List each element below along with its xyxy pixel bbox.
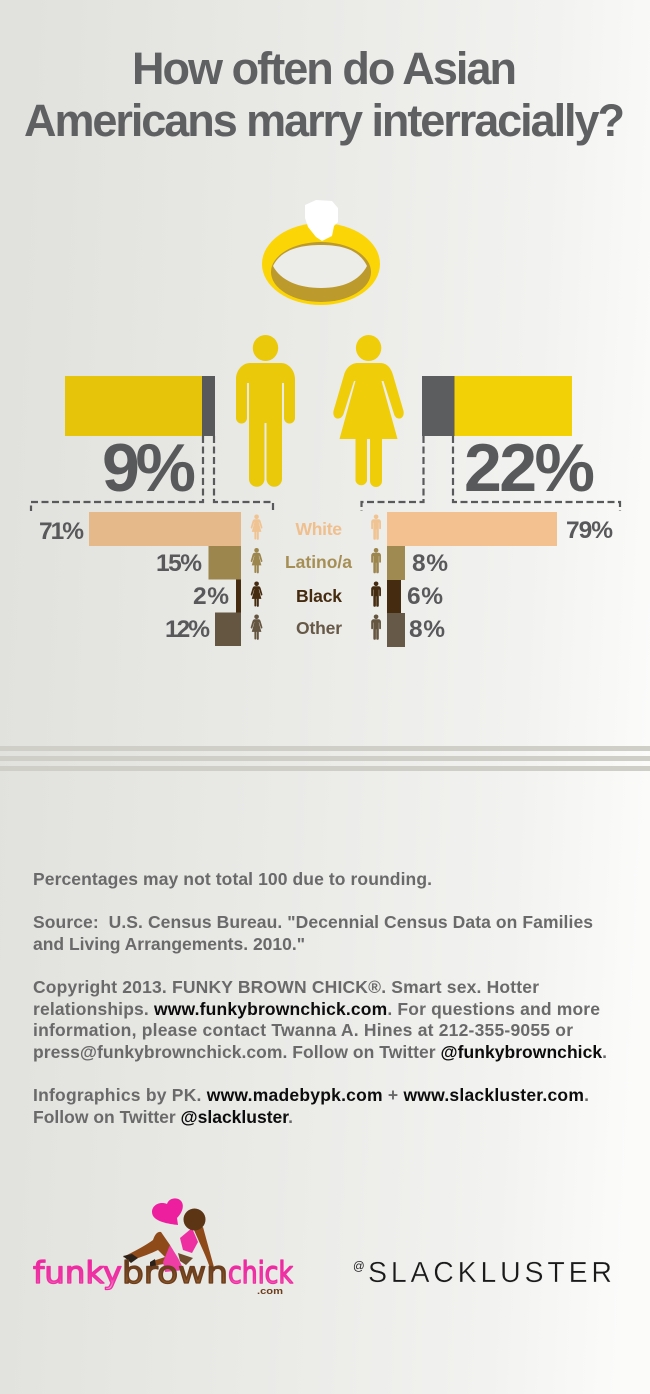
logo: Funky Brown Chick <box>33 1198 294 1296</box>
bar: women 22 percent <box>422 376 572 436</box>
chart: men's spouse race: 15% <box>156 550 202 577</box>
title: Americans marry interracially? <box>24 95 625 146</box>
chart: women's spouse race: 6% <box>407 583 443 610</box>
icon: pink heart <box>152 1198 183 1225</box>
chart: men's spouse race: 12% <box>165 616 210 643</box>
text block: source: and Living Arrangements. 2010." <box>33 934 305 954</box>
logo: Slackluster: SLACKLUSTER <box>368 1257 612 1289</box>
category labels: Black <box>296 586 342 606</box>
text block: copyright <box>33 977 607 1062</box>
chart: men's spouse race: 71% <box>39 518 84 545</box>
category labels <box>285 519 352 638</box>
chart: women's spouse race: 79% <box>566 517 613 544</box>
text block: credits: Follow on Twitter @slackluster. <box>33 1107 293 1127</box>
category labels: Latino/a <box>285 552 352 572</box>
chart: women's spouse race <box>387 512 613 647</box>
text block: copyright: press@funkybrownchick.com. Follow on Twitter @funkybrownchick. <box>33 1042 607 1062</box>
text block: copyright: information, please contact Twanna A. Hines at 212-355-9055 or <box>33 1020 573 1040</box>
bar: men 9 percent <box>65 376 215 436</box>
chart: men's spouse race <box>39 512 241 646</box>
title <box>24 43 625 146</box>
chart: women's spouse race: 8% <box>409 616 445 643</box>
text block: source: Source: U.S. Census Bureau. "Decennial Census Data on Families <box>33 912 593 932</box>
logo: Funky Brown Chick: .com <box>257 1286 283 1296</box>
text block: source <box>33 912 593 954</box>
icon: woman <box>333 335 404 487</box>
logo: Funky Brown Chick: chick <box>228 1256 294 1291</box>
icon: man <box>236 335 295 487</box>
dashed bracket: women <box>362 436 620 511</box>
text block: copyright: Copyright 2013. FUNKY BROWN CHICK®. Smart sex. Hotter <box>33 977 539 997</box>
text block: credits: Infographics by PK. www.madebypk.com + www.slackluster.com. <box>33 1085 589 1105</box>
icons: small women <box>251 514 262 640</box>
logo: Funky Brown Chick: brown <box>122 1256 228 1291</box>
logo: Funky Brown Chick: funky <box>33 1256 122 1291</box>
title: How often do Asian <box>132 43 517 94</box>
figure: 9%: 9% <box>102 430 196 506</box>
text block: credits <box>33 1085 589 1127</box>
text block: rounding note: Percentages may not total 100 due to rounding. <box>33 869 432 889</box>
icon: wedding ring with diamond <box>262 200 380 305</box>
category labels: White <box>296 519 342 539</box>
chart: women's spouse race: 8% <box>412 550 448 577</box>
figure: 22%: 22% <box>464 430 595 506</box>
text block: copyright: relationships. www.funkybrownchick.com. For questions and more <box>33 999 600 1019</box>
category labels: Other <box>296 618 342 638</box>
icons: small men <box>371 514 381 640</box>
logo: Slackluster: @ <box>353 1261 365 1273</box>
chart: men's spouse race: 2% <box>193 583 229 610</box>
dashed bracket: men <box>31 436 273 511</box>
